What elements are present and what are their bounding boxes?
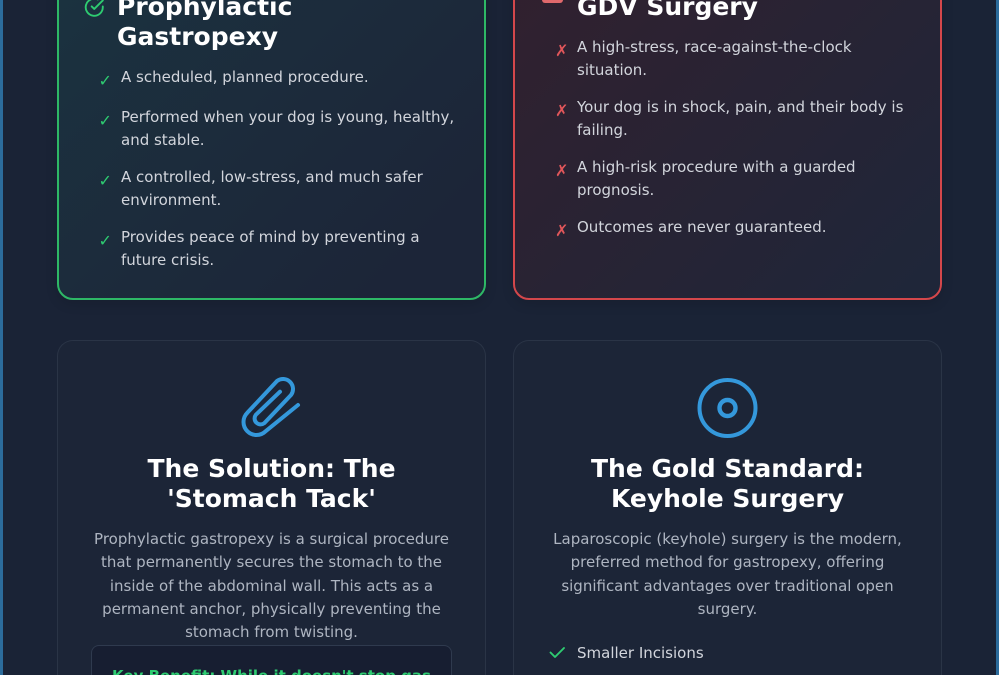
risk 3: A high-risk procedure with a guarded — [577, 158, 856, 176]
risk 2: failing. — [577, 121, 628, 139]
benefit 1: A scheduled, planned procedure. — [121, 68, 369, 86]
panel: prophylactic gastropexy — [57, 0, 486, 300]
text: solution description: Prophylactic gastropexy is a surgical procedure — [94, 530, 449, 548]
risk 1: A high-stress, race-against-the-clock — [577, 38, 852, 56]
icon: check circle — [84, 0, 104, 17]
risk 2: Your dog is in shock, pain, and their body is — [577, 98, 903, 116]
benefit 3: A controlled, low-stress, and much safer — [121, 168, 423, 186]
benefit 2: ✓ — [98, 111, 112, 130]
benefit 3: environment. — [121, 191, 221, 209]
callout: key benefit — [91, 645, 452, 675]
heading: the solution: 'Stomach Tack' — [167, 484, 376, 513]
risk 2 — [555, 98, 903, 139]
text: keyhole description — [553, 530, 902, 618]
benefit 4 — [98, 228, 420, 269]
risk 3: prognosis. — [577, 181, 654, 199]
risk 4: ✗ — [555, 221, 568, 240]
text: solution description: inside of the abdominal wall. This acts as a — [110, 577, 433, 595]
risk 2: ✗ — [555, 101, 568, 120]
benefit 4: Provides peace of mind by preventing a — [121, 228, 420, 246]
benefit 3: ✓ — [98, 171, 112, 190]
left edge stripe — [0, 0, 3, 675]
risk 3: ✗ — [555, 161, 568, 180]
benefit 2: and stable. — [121, 131, 205, 149]
benefit 4: future crisis. — [121, 251, 214, 269]
heading: the solution — [147, 454, 396, 513]
heading: the solution: The Solution: The — [147, 454, 396, 483]
risk 1: situation. — [577, 61, 647, 79]
heading: gold standard — [591, 454, 864, 513]
list: prophylactic benefits — [98, 68, 454, 269]
heading: gold standard: The Gold Standard: — [591, 454, 864, 483]
text: keyhole description: preferred method for gastropexy, offering — [571, 553, 884, 571]
benefit 2 — [98, 108, 454, 149]
benefit 1: ✓ — [98, 71, 112, 90]
benefit 4: ✓ — [98, 231, 112, 250]
risk 4: Outcomes are never guaranteed. — [577, 218, 827, 236]
text: solution description — [94, 530, 449, 641]
list item: smaller incisions: Smaller Incisions — [577, 644, 704, 662]
icon: target — [698, 378, 758, 438]
benefit 2: Performed when your dog is young, healthy, — [121, 108, 454, 126]
list: emergency risks — [555, 38, 903, 240]
heading: prophylactic gastropexy — [117, 0, 292, 51]
panel: the solution — [57, 340, 486, 675]
text: solution description: that permanently secures the stomach to the — [101, 553, 442, 571]
text: solution description: permanent anchor, physically preventing the — [102, 600, 441, 618]
panel: the gold standard — [513, 340, 942, 675]
text: keyhole description: surgery. — [698, 600, 757, 618]
heading: prophylactic gastropexy: Gastropexy — [117, 22, 278, 51]
benefit 3 — [98, 168, 423, 209]
panel: emergency gdv surgery — [513, 0, 942, 300]
text: keyhole description: significant advantages over traditional open — [561, 577, 894, 595]
risk 1: ✗ — [555, 41, 568, 60]
icon: paperclip — [242, 377, 300, 437]
text: solution description: stomach from twisting. — [185, 623, 358, 641]
icon: alert badge — [542, 0, 563, 3]
text: keyhole description: Laparoscopic (keyhole) surgery is the modern, — [553, 530, 902, 548]
heading: gold standard: Keyhole Surgery — [611, 484, 844, 513]
risk 3 — [555, 158, 856, 199]
risk 1 — [555, 38, 852, 79]
right edge stripe — [996, 0, 999, 675]
icon: check — [550, 647, 565, 658]
